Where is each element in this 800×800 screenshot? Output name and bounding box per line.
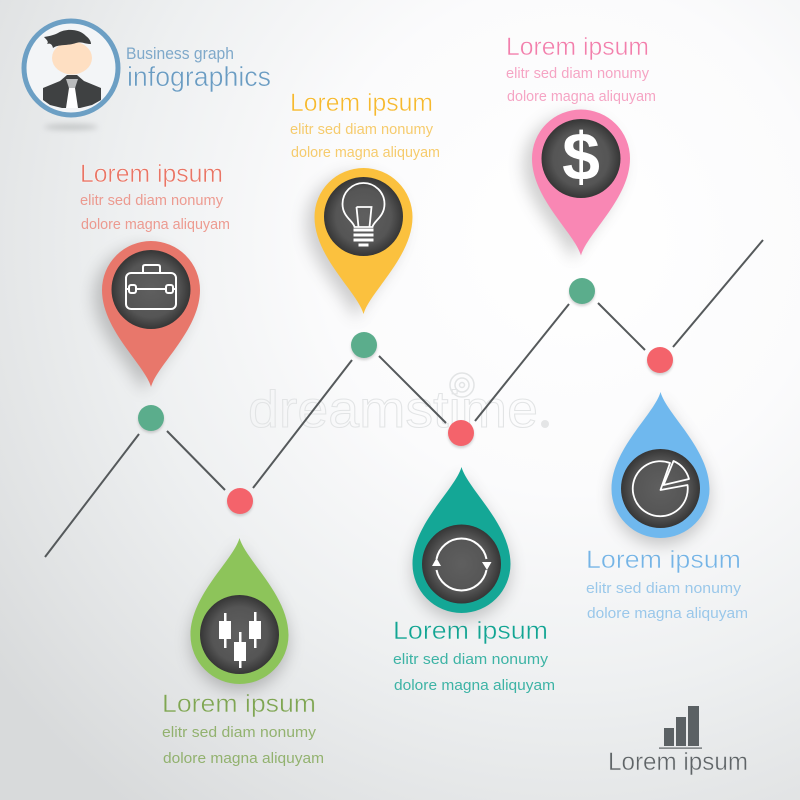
logo text [126,45,271,92]
icon: candlesticks [219,612,261,668]
text block: pink pin: elitr sed diam nonumy [506,66,650,82]
drop: green candlesticks [190,538,288,691]
watermark: dreamstime [248,381,538,439]
text block: yellow pin: Lorem ipsum [290,89,433,117]
text block: green drop: Lorem ipsum [162,690,316,718]
text block: yellow pin [290,89,440,161]
logo text: infographics [127,61,271,92]
drop: blue pie chart [612,392,710,545]
graph dots [138,278,673,516]
text block: blue drop: Lorem ipsum [586,546,741,574]
text block: blue drop [586,546,748,622]
icon: cycle arrows [432,539,492,590]
text block: blue drop: elitr sed diam nonumy [586,581,742,597]
text block: yellow pin: elitr sed diam nonumy [290,122,434,138]
bottom caption: Lorem ipsum [608,748,748,776]
text block: red pin: dolore magna aliquyam [81,217,230,233]
logo text: Business graph [126,45,234,63]
text block: teal drop: Lorem ipsum [393,617,548,645]
text block: pink pin: dolore magna aliquyam [507,89,656,105]
icon: pie chart [633,461,689,516]
pin: red briefcase [94,241,200,393]
text block: green drop [162,690,324,767]
pin: pink dollar [524,110,630,262]
graph line [45,240,763,557]
text block: teal drop [393,617,555,694]
text block: red pin: elitr sed diam nonumy [80,193,224,209]
text block: teal drop: elitr sed diam nonumy [393,652,549,668]
text block: red pin: Lorem ipsum [80,160,223,188]
icon: light bulb [342,183,384,245]
text block: pink pin [506,33,656,105]
text block: teal drop: dolore magna aliquyam [394,678,555,694]
drop: teal cycle [412,467,510,620]
icon: briefcase [126,265,176,309]
text block: green drop: dolore magna aliquyam [163,751,324,767]
text block: yellow pin: dolore magna aliquyam [291,145,440,161]
logo: businessman avatar [24,21,118,130]
text block: blue drop: dolore magna aliquyam [587,606,748,622]
icon: dollar sign: $ [562,119,600,195]
pin: yellow light bulb [306,168,412,320]
text block: pink pin: Lorem ipsum [506,33,649,61]
icon: bar chart [659,706,702,749]
text block: red pin [80,160,230,233]
text block: green drop: elitr sed diam nonumy [162,725,317,741]
